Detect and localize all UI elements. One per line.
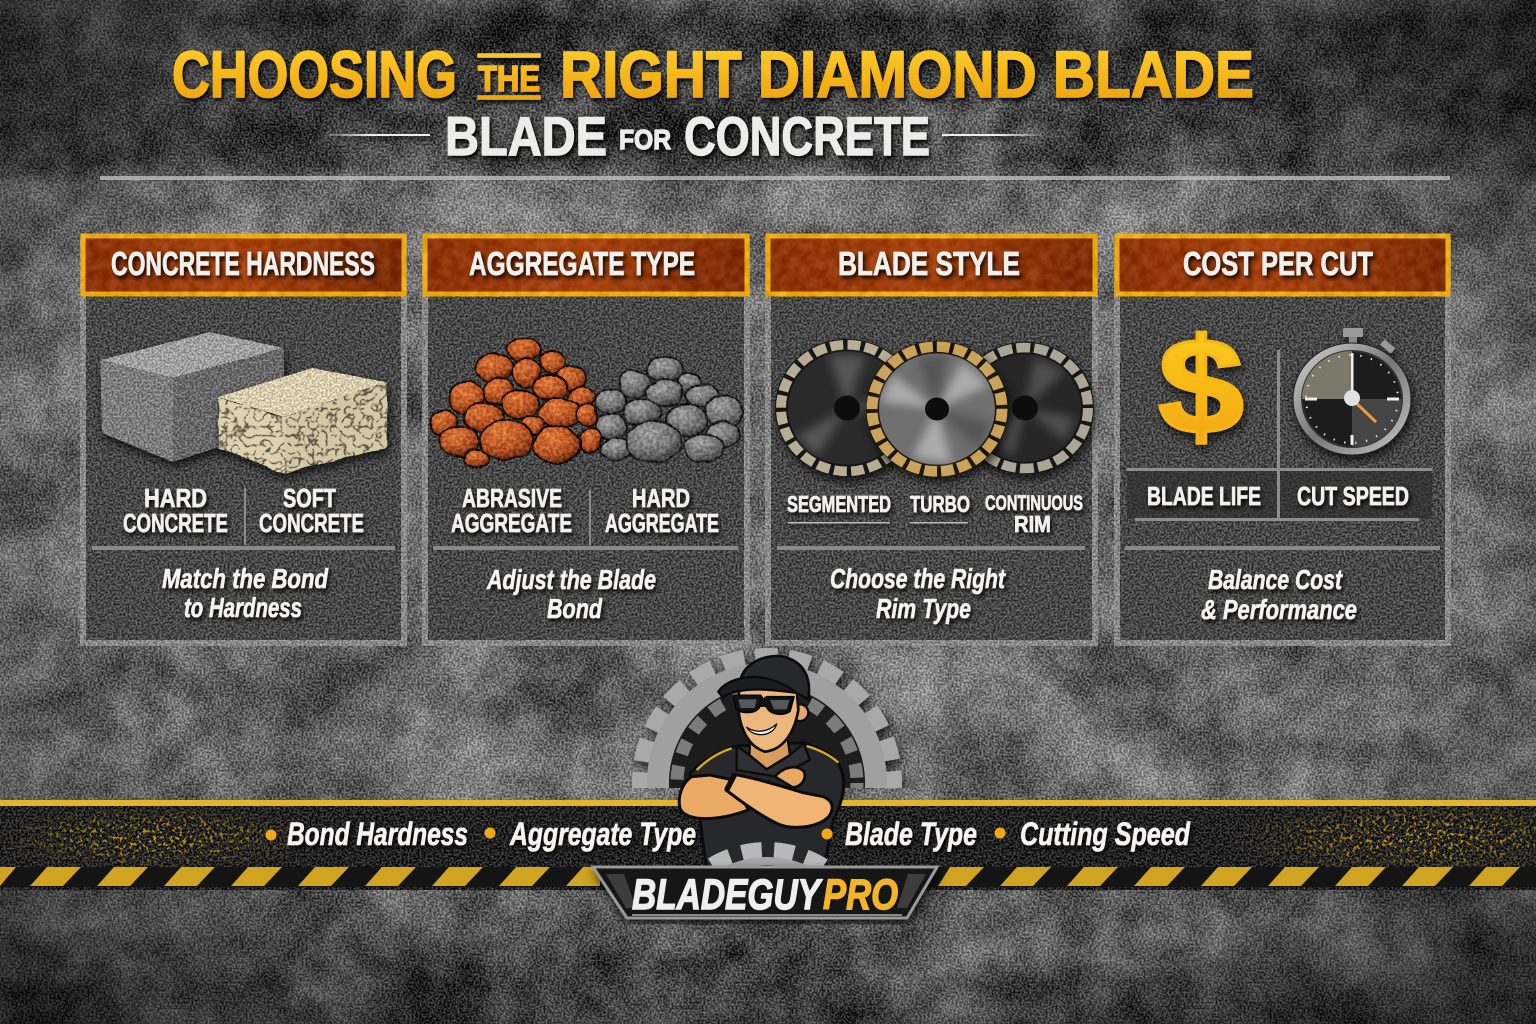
label: hard concrete xyxy=(123,483,228,538)
header: aggregate type: AGGREGATE TYPE xyxy=(469,245,695,282)
tagline: balance cost and performance: Balance Cost xyxy=(1208,564,1343,595)
subtitle: CONCRETE xyxy=(684,105,930,167)
tagline: adjust the blade bond xyxy=(486,564,656,624)
label: hard concrete: CONCRETE xyxy=(123,508,228,538)
icon: abrasive orange aggregate pile xyxy=(430,338,601,467)
label: cut speed: CUT SPEED xyxy=(1297,481,1409,511)
label: soft concrete xyxy=(259,483,364,538)
label: abrasive aggregate: ABRASIVE xyxy=(462,483,562,513)
hazard strip footer xyxy=(0,800,1536,890)
header: cost per cut xyxy=(1117,236,1448,294)
logo emblem: gears, mascot and wordmark xyxy=(588,646,946,924)
subtitle xyxy=(320,105,1046,167)
header: blade style xyxy=(768,236,1095,294)
hazard stripes xyxy=(0,867,1520,886)
title xyxy=(172,37,1254,111)
tagline: choose the right rim type: Choose the Right xyxy=(830,563,1006,594)
label: turbo xyxy=(910,491,970,524)
bullet: aggregate type: Aggregate Type xyxy=(509,816,696,852)
label: continuous rim: RIM xyxy=(1014,511,1051,537)
header: concrete hardness: CONCRETE HARDNESS xyxy=(111,245,375,282)
icon: continuous rim blade xyxy=(956,342,1094,474)
header: cost per cut: COST PER CUT xyxy=(1183,245,1373,282)
wordmark badge: BLADEGUY xyxy=(632,871,823,919)
label: soft concrete: SOFT xyxy=(283,483,336,513)
footer checklist xyxy=(266,816,1191,852)
bullet: cutting speed: Cutting Speed xyxy=(1020,816,1191,852)
icon: segmented blade xyxy=(775,339,919,477)
header: blade style: BLADE STYLE xyxy=(838,245,1020,282)
tagline: balance cost and performance: & Performance xyxy=(1201,594,1357,625)
label: segmented xyxy=(787,491,891,524)
icon: hard concrete block xyxy=(100,332,284,462)
header: aggregate type xyxy=(425,236,747,294)
panel: cost per cut xyxy=(1117,236,1448,643)
bullet: blade type: Blade Type xyxy=(845,816,977,852)
label: continuous rim: CONTINUOUS xyxy=(985,492,1083,515)
label: soft concrete: CONCRETE xyxy=(259,508,364,538)
label: abrasive aggregate: AGGREGATE xyxy=(451,508,572,538)
label: hard aggregate: AGGREGATE xyxy=(605,508,719,538)
title: RIGHT DIAMOND BLADE xyxy=(560,37,1254,111)
bullet: aggregate type xyxy=(484,816,696,852)
panel: concrete hardness xyxy=(83,236,404,643)
tagline: choose the right rim type xyxy=(830,563,1006,624)
tagline: adjust the blade bond: Bond xyxy=(547,593,603,624)
label: turbo: TURBO xyxy=(910,491,970,517)
tagline: adjust the blade bond: Adjust the Blade xyxy=(486,564,656,595)
label: hard aggregate: HARD xyxy=(632,483,690,513)
mascot xyxy=(679,656,844,870)
tagline: balance cost and performance xyxy=(1201,564,1357,625)
label: hard aggregate xyxy=(605,483,719,538)
wordmark badge: PRO xyxy=(823,871,898,919)
wordmark badge xyxy=(593,867,937,919)
label: hard concrete: HARD xyxy=(144,483,207,513)
label: segmented: SEGMENTED xyxy=(787,491,891,517)
title: THE xyxy=(478,58,540,99)
title: CHOOSING xyxy=(172,37,457,111)
label: continuous rim xyxy=(985,492,1083,537)
header: concrete hardness xyxy=(83,236,404,294)
label: blade life: BLADE LIFE xyxy=(1147,481,1261,511)
icon: turbo blade xyxy=(866,341,1008,477)
label: abrasive aggregate xyxy=(451,483,572,538)
small gear arc xyxy=(708,842,828,866)
tagline: match the bond xyxy=(162,563,329,623)
subtitle: FOR xyxy=(619,124,671,155)
large gear arc xyxy=(627,646,910,788)
bullet: bond hardness: Bond Hardness xyxy=(287,816,468,852)
icon: soft concrete block xyxy=(218,368,388,473)
panel: aggregate type xyxy=(425,236,747,643)
icon: stopwatch xyxy=(1293,328,1411,455)
tagline: match the bond: to Hardness xyxy=(184,592,302,623)
bullet: blade type xyxy=(822,816,977,852)
subtitle: BLADE xyxy=(445,105,607,167)
panel: blade style xyxy=(768,236,1095,643)
tagline: match the bond: Match the Bond xyxy=(162,563,329,594)
icon: dollar sign: $ xyxy=(1158,310,1244,462)
tagline: choose the right rim type: Rim Type xyxy=(876,593,971,624)
icon: hard grey aggregate pile xyxy=(594,357,743,463)
